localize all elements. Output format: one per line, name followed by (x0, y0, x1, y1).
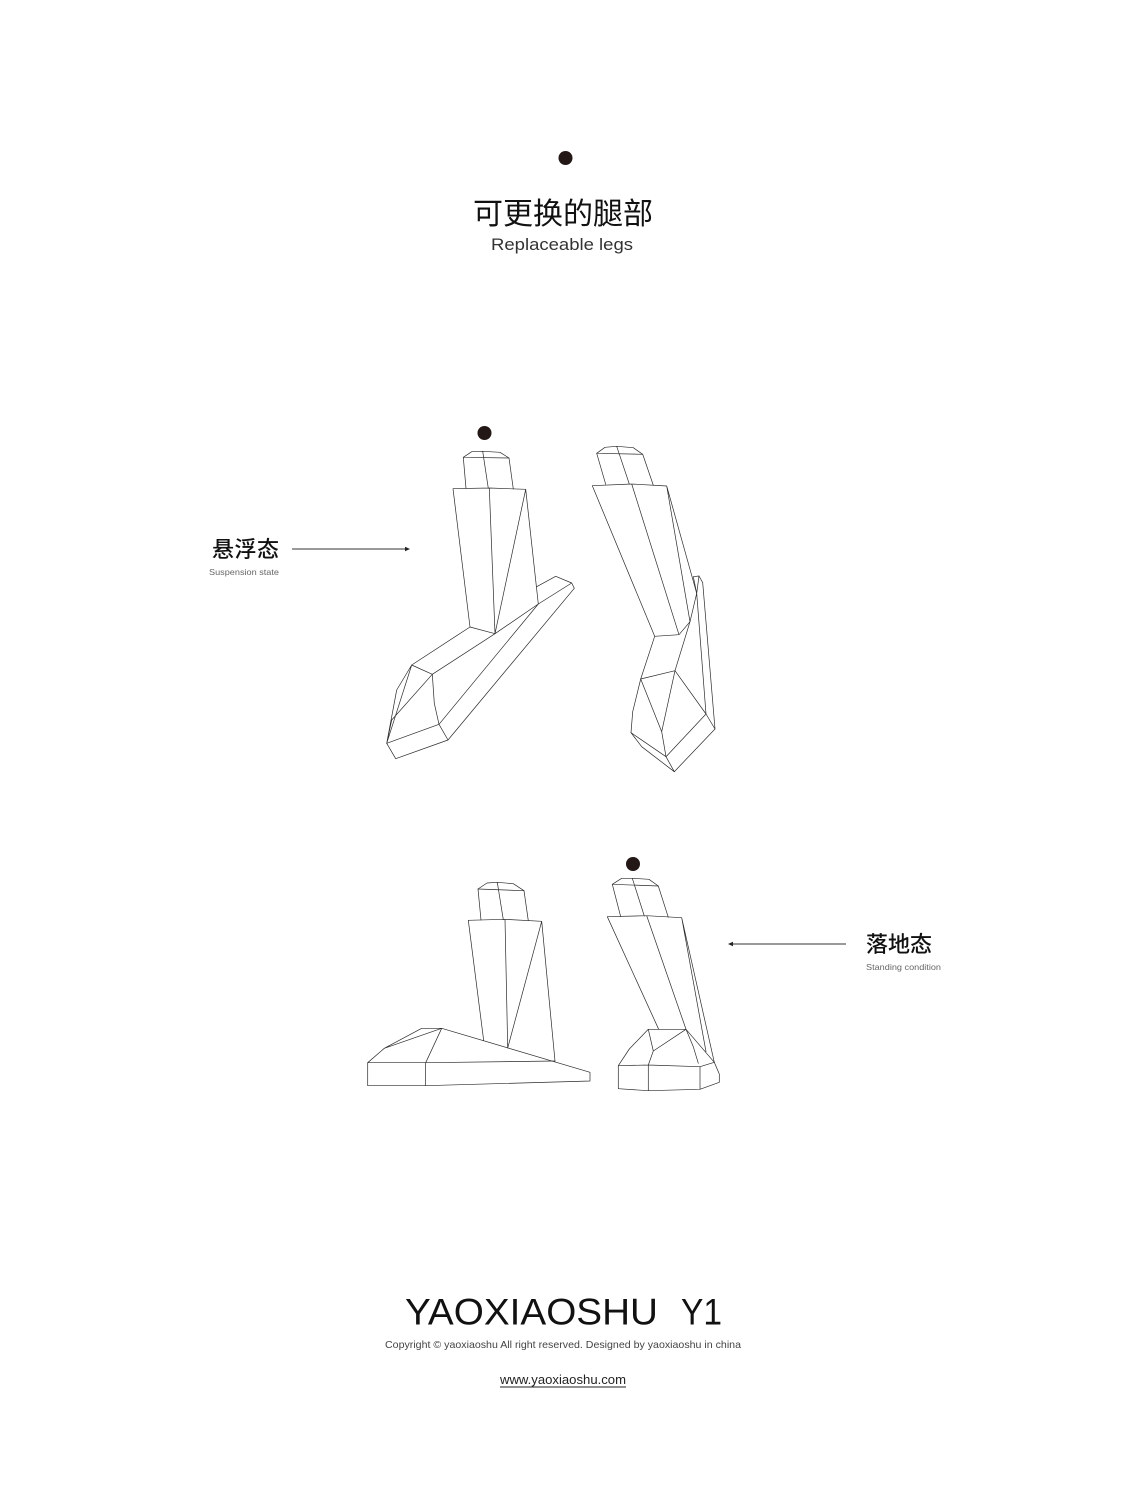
subtitle: Replaceable legs (491, 235, 633, 254)
icon: dot on standing leg (626, 857, 640, 871)
website link: www.yaoxiaoshu.com (499, 1372, 626, 1387)
label: standing condition: Standing condition (866, 962, 941, 972)
label: suspension state: Suspension state (209, 567, 279, 577)
copyright line: Copyright © yaoxiaoshu All right reserved. Designed by yaoxiaoshu in china (385, 1339, 741, 1351)
arrow: standing condition pointing left (728, 942, 846, 946)
icon: dot on suspended leg (478, 426, 492, 440)
wireframe: standing leg, front view (607, 878, 719, 1091)
label: suspension state (209, 537, 279, 577)
label: suspension state: 悬浮态 (212, 537, 279, 562)
footer brand name: Y1 (681, 1292, 722, 1332)
wireframe: suspended leg, front view (592, 446, 715, 772)
label: standing condition (866, 932, 941, 972)
wireframe: standing leg, side view (368, 882, 590, 1086)
wireframe: suspended leg, side view (387, 451, 574, 759)
arrow: suspension state pointing right (292, 547, 410, 551)
label: standing condition: 落地态 (866, 932, 932, 957)
icon: header dot (558, 151, 572, 165)
title: 可更换的腿部 (473, 198, 653, 231)
footer brand name: YAOXIAOSHU (405, 1292, 658, 1332)
